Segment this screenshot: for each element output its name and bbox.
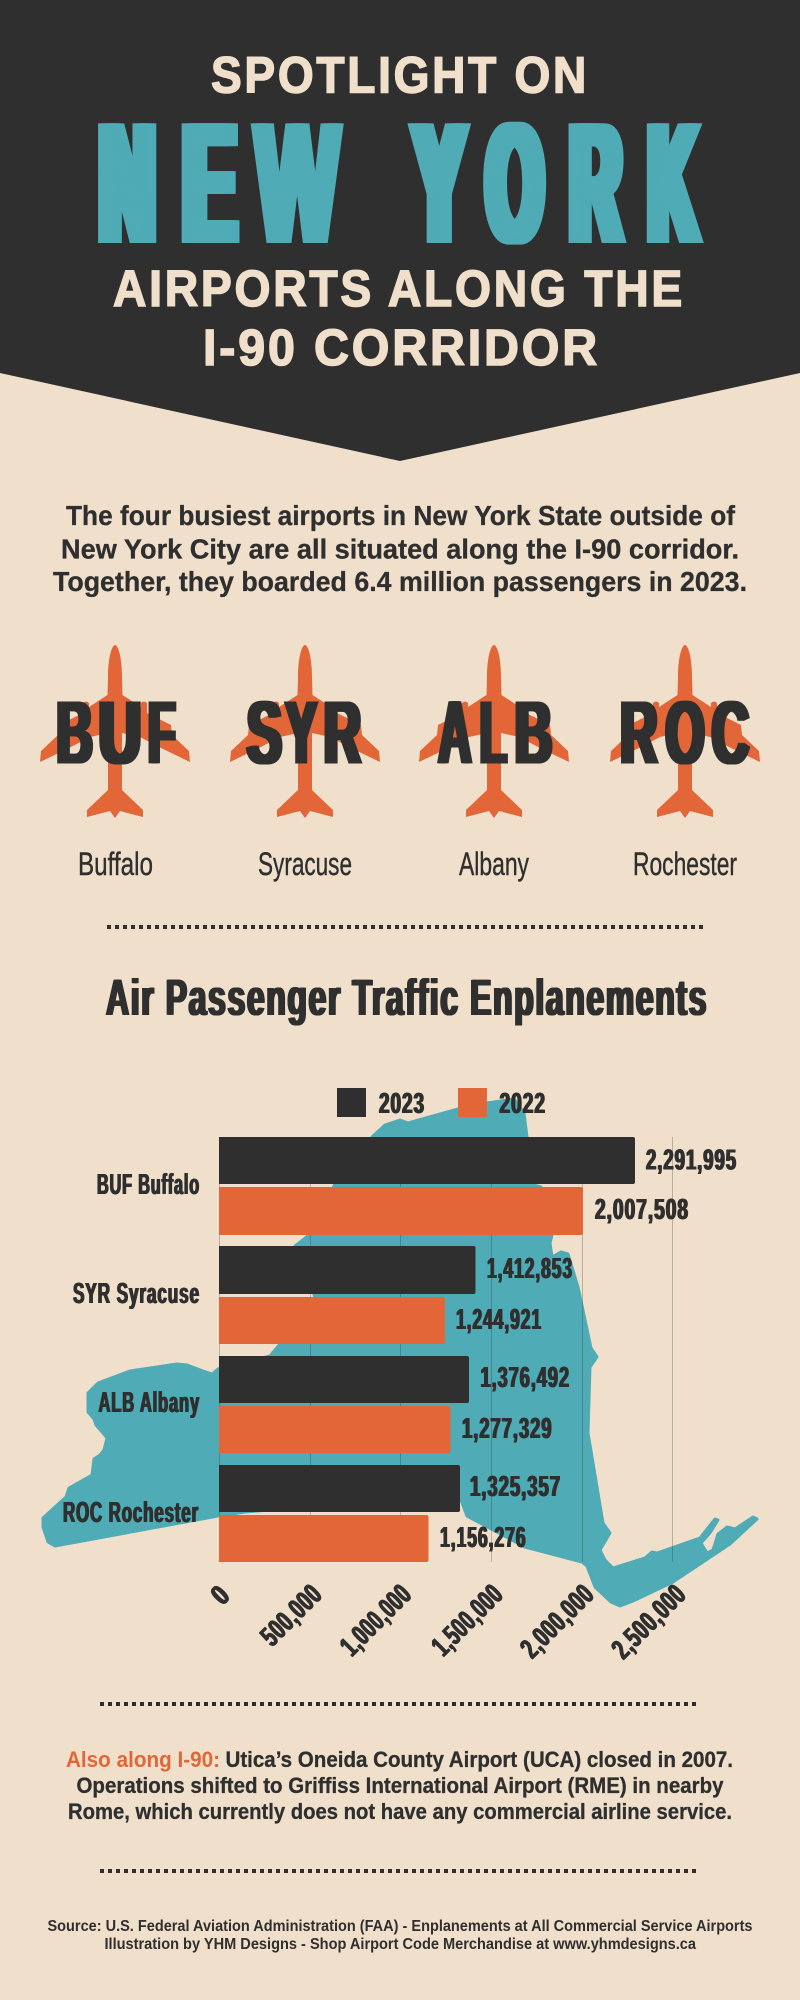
icon: plane bbox=[230, 645, 380, 818]
airport code: L bbox=[480, 684, 507, 784]
x axis labels bbox=[205, 1578, 693, 1665]
intro text: Together, they boarded 6.4 million passengers in 2023. bbox=[53, 566, 747, 597]
city name: Buffalo bbox=[78, 846, 153, 882]
x axis labels: 500,000 bbox=[255, 1578, 329, 1653]
legend: 2022 bbox=[458, 1088, 546, 1120]
title: new york: R bbox=[570, 89, 621, 277]
airport code: R bbox=[324, 684, 361, 784]
map: New York State bbox=[43, 1099, 757, 1606]
airport code: F bbox=[148, 684, 176, 784]
bars: SYR Syracuse: SYR Syracuse bbox=[73, 1278, 200, 1310]
heading: airports along the: AIRPORTS ALONG THE bbox=[113, 260, 685, 317]
airport: Rochester bbox=[610, 645, 760, 882]
callout: also along I-90: Operations shifted to Griffiss International Airport (RME) in nearby bbox=[76, 1773, 724, 1798]
title: new york: W bbox=[256, 89, 339, 277]
bars: ALB Albany bbox=[98, 1356, 570, 1453]
callout: also along I-90: Rome, which currently does not have any commercial airline service. bbox=[68, 1799, 732, 1824]
title: new york bbox=[100, 89, 697, 277]
bars: SYR Syracuse bbox=[73, 1246, 573, 1344]
airport: Buffalo bbox=[40, 645, 190, 882]
airport code: C bbox=[712, 684, 749, 784]
header banner: K bbox=[649, 89, 697, 277]
icon: plane bbox=[40, 645, 190, 818]
chart legend bbox=[337, 1088, 546, 1120]
heading: i-90 corridor: I-90 CORRIDOR bbox=[203, 319, 600, 376]
airport code: Y bbox=[286, 684, 317, 784]
intro text: The four busiest airports in New York State outside of bbox=[66, 500, 736, 531]
airport code: R bbox=[620, 684, 657, 784]
bar chart bbox=[63, 1137, 737, 1665]
bars: BUF Buffalo: BUF Buffalo bbox=[97, 1169, 200, 1201]
bars: BUF Buffalo: 2,291,995 bbox=[646, 1144, 737, 1176]
legend: 2023 bbox=[337, 1088, 425, 1120]
icon: plane bbox=[419, 645, 569, 818]
legend: 2023: 2023 bbox=[379, 1088, 425, 1120]
airport code: U bbox=[99, 684, 141, 784]
intro text bbox=[53, 500, 747, 597]
city name: Syracuse bbox=[258, 846, 352, 882]
header banner bbox=[0, 0, 800, 461]
callout: also along I-90: Also along I-90: bbox=[66, 1747, 220, 1772]
airport code: S bbox=[247, 684, 282, 784]
bars: ALB Albany: ALB Albany bbox=[98, 1387, 200, 1419]
bars: ROC Rochester: ROC Rochester bbox=[63, 1497, 199, 1529]
legend: 2022: 2022 bbox=[500, 1088, 546, 1120]
callout: also along I-90 bbox=[66, 1747, 733, 1824]
city name: Rochester bbox=[633, 846, 737, 882]
bars: SYR Syracuse: 1,244,921 bbox=[456, 1304, 542, 1336]
airport code: O bbox=[666, 684, 704, 784]
icon: plane bbox=[610, 645, 760, 818]
heading: spotlight on: SPOTLIGHT ON bbox=[211, 46, 589, 104]
bars: ALB Albany: 1,277,329 bbox=[462, 1413, 552, 1445]
source credits bbox=[48, 1918, 753, 1953]
bars: ROC Rochester bbox=[63, 1465, 561, 1562]
airport: Syracuse bbox=[230, 645, 380, 882]
airport code: B bbox=[57, 684, 93, 784]
x axis labels: 2,500,000 bbox=[606, 1578, 693, 1665]
bars: ROC Rochester: 1,325,357 bbox=[470, 1471, 561, 1503]
x axis labels: 1,000,000 bbox=[334, 1578, 418, 1662]
airport code: B bbox=[515, 684, 552, 784]
airport: Albany bbox=[419, 645, 569, 882]
title: new york: E bbox=[184, 89, 235, 277]
bars: BUF Buffalo: 2,007,508 bbox=[595, 1194, 689, 1226]
title: new york: O bbox=[487, 89, 542, 277]
intro text: New York City are all situated along the I-90 corridor. bbox=[61, 534, 739, 564]
airport code: A bbox=[438, 684, 471, 784]
bars: ROC Rochester: 1,156,276 bbox=[440, 1522, 526, 1554]
x axis labels: 2,000,000 bbox=[515, 1578, 601, 1665]
x axis labels: 0 bbox=[205, 1579, 237, 1611]
callout: also along I-90: Utica’s Oneida County Airport (UCA) closed in 2007. bbox=[226, 1747, 733, 1772]
bars: ALB Albany: 1,376,492 bbox=[480, 1362, 570, 1394]
title: new york: Y bbox=[414, 89, 464, 277]
bars: SYR Syracuse: 1,412,853 bbox=[487, 1253, 573, 1285]
bars: BUF Buffalo bbox=[97, 1137, 737, 1235]
source credits: Illustration by YHM Designs - Shop Airport Code Merchandise at www.yhmdesigns.ca bbox=[104, 1936, 696, 1953]
x axis labels: 1,500,000 bbox=[426, 1578, 510, 1662]
title: new york: N bbox=[100, 89, 154, 277]
city name: Albany bbox=[459, 846, 529, 882]
